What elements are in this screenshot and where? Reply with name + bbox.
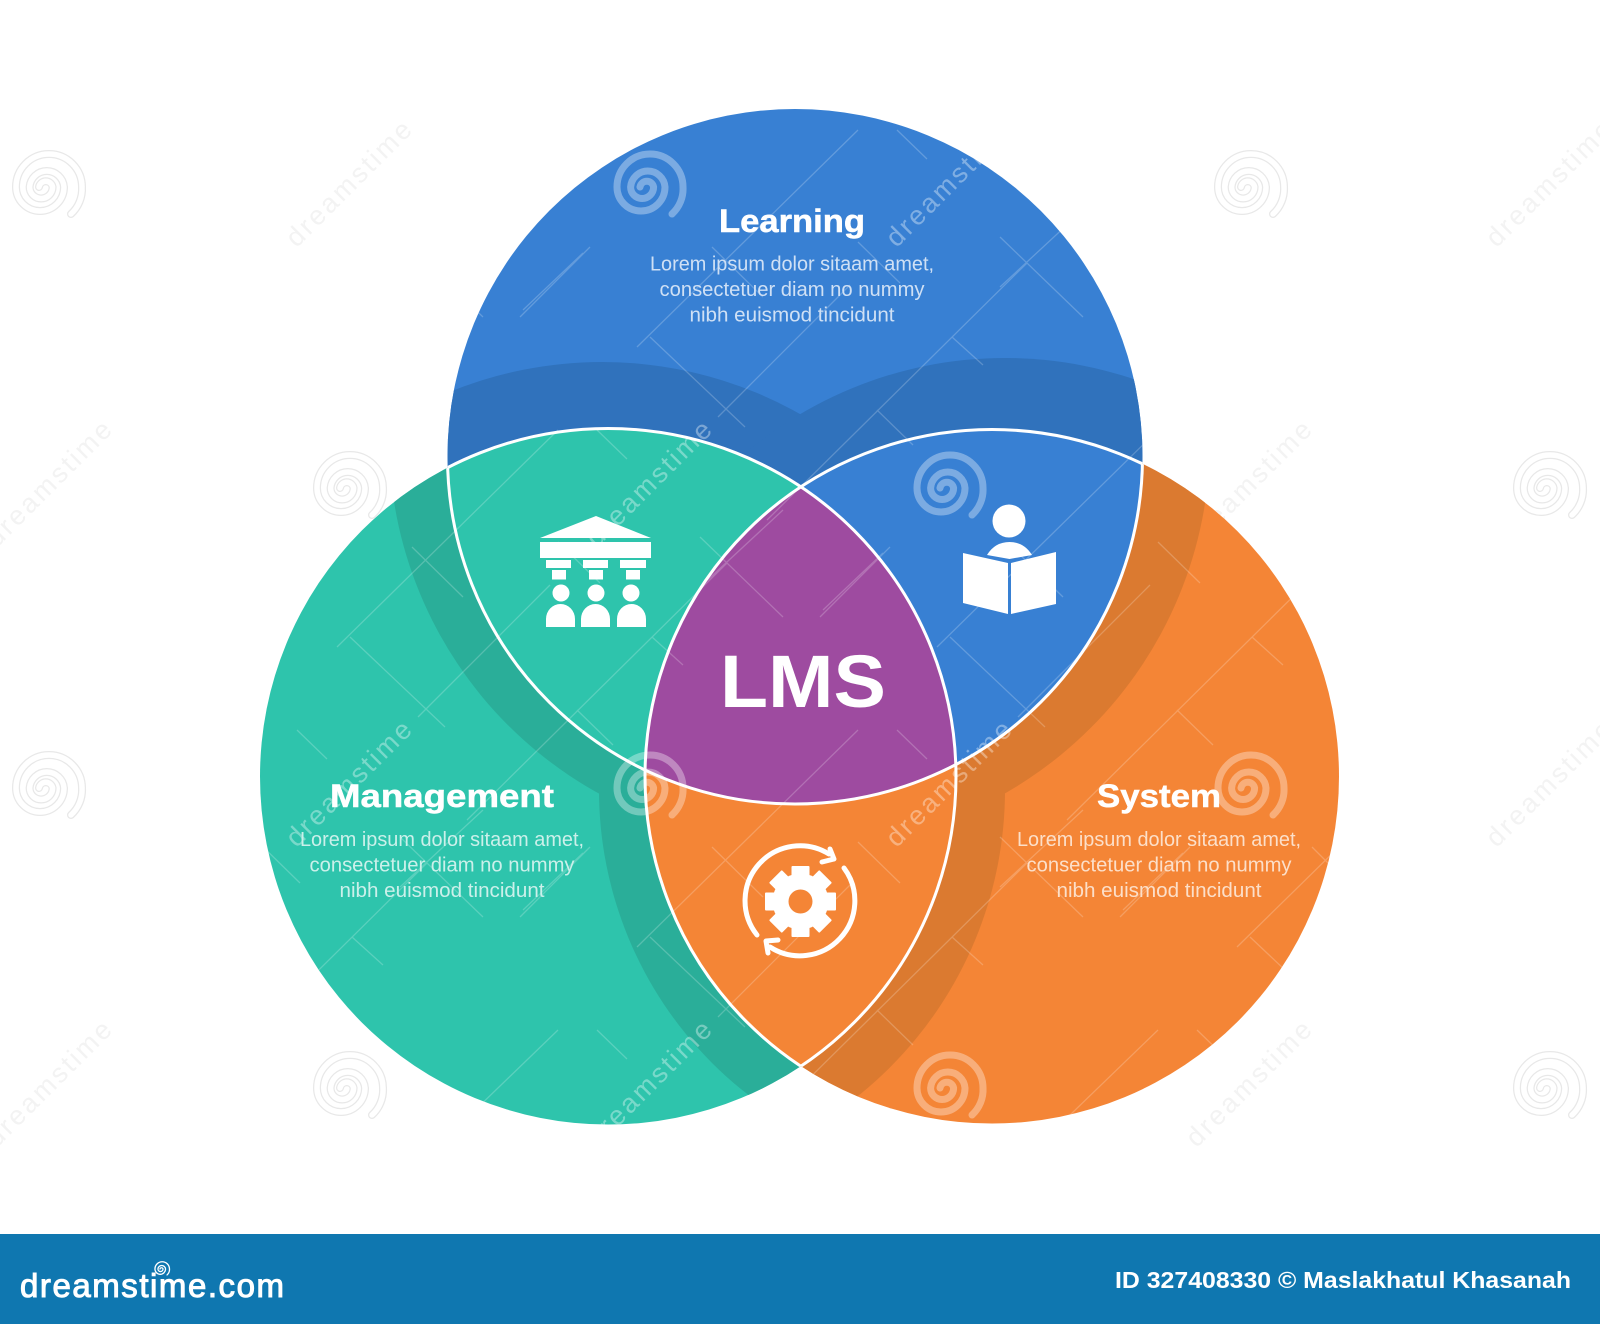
- text: Management description: consectetuer diam no nummy: [310, 854, 574, 876]
- text: Learning description: [650, 254, 934, 326]
- icon: person reading book: [963, 504, 1056, 614]
- watermark over circles: dreamstime: [580, 1015, 718, 1153]
- footer credit: ID 327408330 © Maslakhatul Khasanah: [1115, 1267, 1571, 1293]
- lens: Learning and System: [804, 431, 1141, 762]
- text: System description: consectetuer diam no nummy: [1026, 854, 1292, 876]
- watermark on white background: dreamstime: [1180, 1015, 1318, 1153]
- heading: Learning: Learning: [719, 203, 865, 239]
- text: Learning description: consectetuer diam no nummy: [660, 279, 924, 301]
- lens: centre LMS: [646, 488, 954, 802]
- heading: Management: Management: [330, 778, 554, 814]
- lens: Management and System: [646, 767, 954, 1064]
- watermark over circles: [154, 130, 1330, 1275]
- text: Management description: nibh euismod tincidunt: [340, 880, 545, 902]
- watermark over circles: dreamstime: [280, 715, 418, 853]
- text: System description: nibh euismod tincidunt: [1056, 880, 1262, 902]
- text: Learning description: nibh euismod tincidunt: [690, 304, 895, 326]
- lens: Learning and Management: [449, 430, 798, 768]
- watermark over circles: dreamstime: [580, 415, 718, 553]
- watermark over circles: dreamstime: [880, 715, 1018, 853]
- circle: Management: [260, 468, 801, 1124]
- text: Management description: [300, 829, 584, 902]
- footer logo: dreamstime.com: dreamstime.com: [20, 1267, 284, 1304]
- text: Management description: Lorem ipsum dolor sitaam amet,: [300, 829, 584, 851]
- text: System description: [1017, 829, 1301, 902]
- text: Learning description: Lorem ipsum dolor sitaam amet,: [650, 254, 934, 276]
- centre label: LMS: LMS: [720, 640, 886, 723]
- heading: System: System: [1097, 778, 1221, 814]
- watermark on white background: [0, 115, 1600, 1153]
- watermark on white background: dreamstime: [280, 115, 418, 253]
- icon: gear with cycle arrows: [745, 846, 855, 956]
- footer bar: [0, 1234, 1600, 1324]
- watermark on white background: dreamstime: [1180, 415, 1318, 553]
- circle: System: [801, 464, 1339, 1124]
- white lens outlines: [446, 427, 1144, 1067]
- watermark over circles: dreamstime: [880, 115, 1018, 253]
- text: System description: Lorem ipsum dolor sitaam amet,: [1017, 829, 1301, 851]
- circle: Learning: [448, 109, 1142, 485]
- icon: institution with people: [540, 516, 651, 627]
